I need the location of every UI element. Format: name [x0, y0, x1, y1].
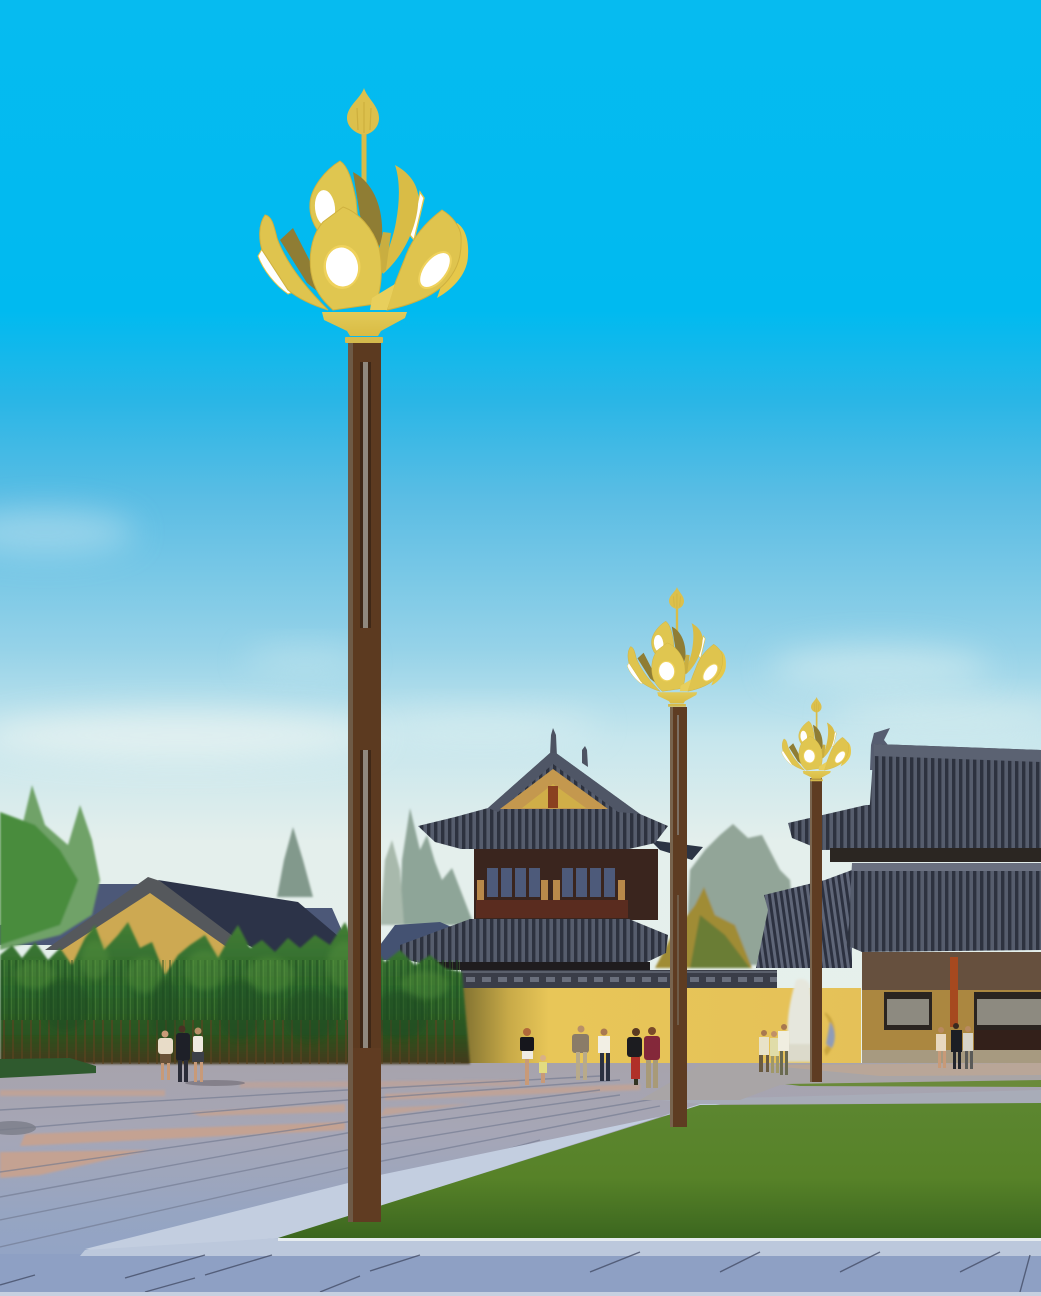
pagoda — [400, 728, 703, 970]
plaza joint lines — [0, 1076, 660, 1250]
far blue roofs — [0, 884, 346, 945]
plaza right side paving — [660, 1090, 1041, 1104]
left pavement shadow — [0, 1121, 36, 1135]
main lamp — [258, 88, 468, 1222]
main lamp pole — [348, 342, 381, 1222]
hall steps — [862, 1050, 1041, 1064]
left temple yellow gable — [60, 890, 250, 975]
hall body lower — [862, 990, 1041, 1052]
pagoda gable — [500, 769, 608, 809]
left temple dark roof — [158, 880, 345, 962]
main lamp flower — [258, 88, 468, 343]
main lawn — [278, 1103, 1041, 1239]
hall upper roof — [866, 744, 1041, 830]
light path strip — [85, 1102, 730, 1252]
bamboo grove — [0, 922, 470, 1064]
wall cap tiles — [461, 970, 777, 988]
background trees — [277, 808, 797, 968]
upper lawn strip — [785, 1080, 1041, 1087]
plaza pink bands — [0, 1080, 640, 1178]
left green tree — [0, 785, 100, 950]
left temple gable edge — [45, 877, 262, 960]
hall windows — [884, 992, 1041, 1050]
hall middle eave — [788, 805, 1041, 850]
pagoda windows — [487, 868, 615, 897]
yellow boundary wall — [461, 988, 861, 1064]
stone lion — [786, 979, 835, 1062]
people: centre group — [520, 1026, 660, 1088]
second lamp pole — [670, 707, 687, 1127]
pagoda horns — [550, 728, 588, 767]
hall body upper — [862, 952, 1041, 992]
main hall — [756, 728, 1041, 1064]
foreground paving — [0, 1238, 1041, 1296]
hall horn — [870, 728, 890, 770]
third lamp — [782, 697, 851, 1082]
clouds — [0, 510, 1041, 759]
plaza ground — [0, 1063, 1041, 1296]
people: left group — [158, 1026, 245, 1086]
second lamp flower — [627, 587, 726, 707]
pagoda right eave — [650, 840, 703, 860]
pagoda lower roof — [400, 919, 668, 963]
pagoda upper roof — [418, 753, 668, 849]
third lamp flower — [782, 697, 851, 781]
small blue roof beside pagoda — [380, 922, 470, 960]
hall side roof — [756, 870, 852, 968]
second lamp — [627, 587, 726, 1127]
pagoda body — [474, 849, 658, 920]
people: right groups — [759, 1023, 973, 1075]
pagoda tan posts — [477, 880, 625, 900]
third lamp pole — [810, 778, 822, 1082]
hedge — [0, 1058, 96, 1078]
hall lower roof — [846, 863, 1041, 952]
hall red column — [950, 957, 958, 1027]
left temple — [45, 877, 345, 975]
